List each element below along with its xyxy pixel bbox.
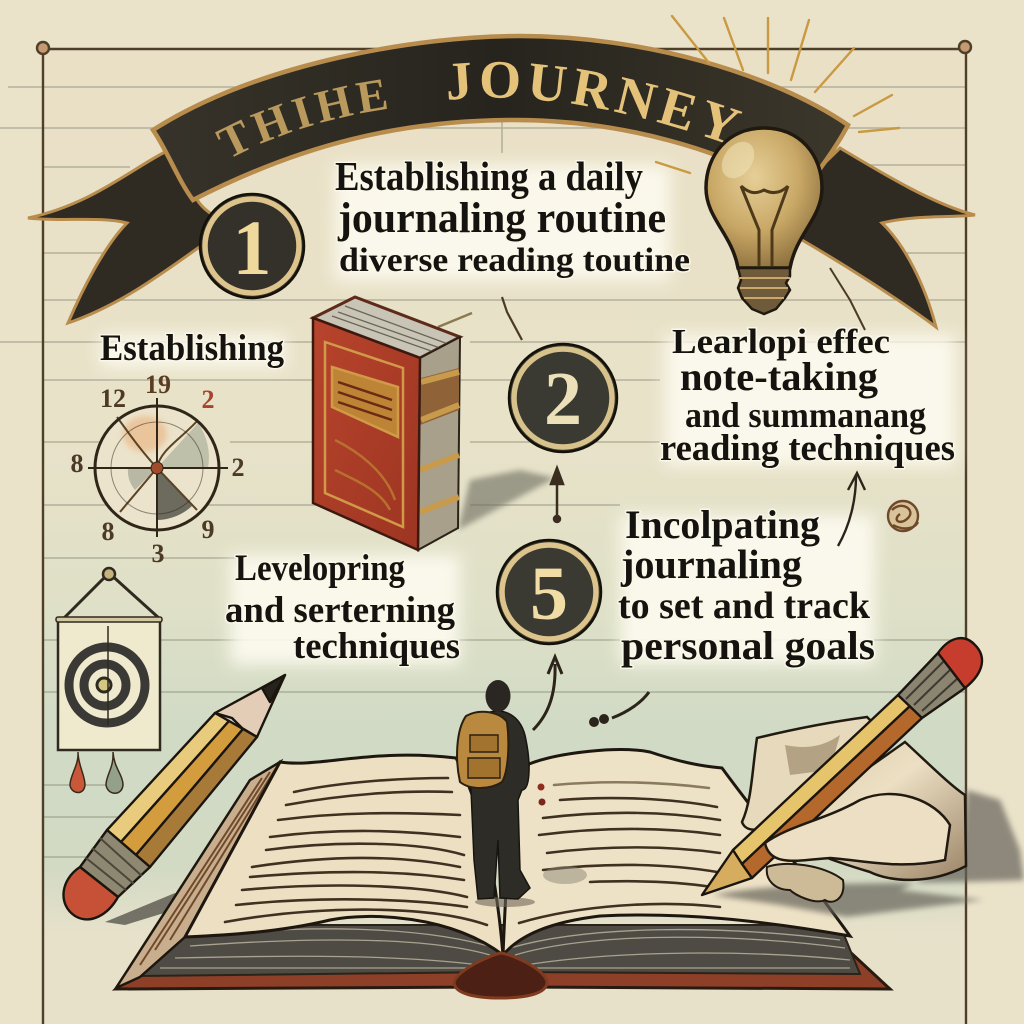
hand shadow: [713, 790, 1024, 917]
target rings: [69, 626, 145, 725]
step 1 text: diverse reading toutine: [339, 242, 690, 279]
step 1 text: Establishing a daily: [335, 153, 643, 199]
left pencil shadow: [105, 893, 190, 925]
banner title: THIHE: THIHE: [215, 79, 387, 157]
clock dial: 8: [102, 517, 114, 546]
title banner: [28, 34, 976, 331]
arrow: to techniques: [838, 473, 865, 546]
clock dial: 8: [70, 449, 84, 478]
banner title: JOURNEY: JOURNEY: [448, 62, 742, 142]
step 5 text: Incolpating: [625, 502, 820, 547]
arrow: between steps: [551, 468, 563, 522]
book shadow: [458, 470, 555, 530]
step 5 text: personal goals: [621, 623, 875, 668]
step 3 text: Learlopi effec: [672, 322, 890, 361]
back of hand: [780, 742, 966, 880]
step 1 text: [335, 153, 690, 279]
red book: [313, 297, 555, 550]
clock dial: 19: [145, 370, 171, 399]
figure body: [460, 711, 530, 899]
arrows: path to figure: [533, 657, 649, 730]
cover: [116, 938, 890, 989]
book cover: [313, 318, 420, 550]
step 5 text: [618, 502, 875, 668]
clock dial: 2: [202, 385, 214, 414]
book clasp: [454, 953, 547, 998]
left page: [185, 755, 503, 955]
figure shadow: [475, 897, 535, 907]
step 2 badge: 2: [544, 357, 582, 441]
clock dial: [70, 370, 244, 568]
clock dial: 9: [202, 515, 214, 544]
step 3 text: note-taking: [680, 354, 878, 399]
hand holding pencil: [742, 717, 966, 880]
left step text: [225, 548, 460, 667]
step 3 text: reading techniques: [660, 428, 955, 469]
step 5 text: journaling: [620, 541, 802, 587]
curled fingers: [767, 864, 843, 902]
backpack: [457, 712, 508, 788]
banner main arc: [153, 36, 848, 200]
right page writing: [519, 782, 720, 923]
step 3 text: and summanang: [685, 395, 926, 435]
clock dial: 3: [152, 539, 164, 568]
fingers behind pencil: [742, 717, 872, 830]
step 2 badge: [509, 344, 617, 452]
page stack: [140, 925, 860, 976]
thumb over pencil: [765, 794, 950, 864]
left step text: techniques: [293, 626, 460, 667]
step 1 badge: [200, 194, 304, 298]
bulb rays: [656, 16, 899, 173]
right pencil: [702, 638, 982, 895]
book pages top: [313, 297, 460, 358]
ink knot doodle: [888, 501, 918, 531]
step 1 text: journaling routine: [337, 195, 666, 242]
book ornament: [325, 342, 403, 527]
clock dial: 12: [100, 384, 126, 413]
left board: [116, 762, 280, 988]
target banner: [56, 568, 162, 793]
step 5 text: to set and track: [618, 585, 871, 627]
step 3 text: [660, 322, 955, 469]
banner tail right: [775, 148, 975, 327]
arrow: right scribble: [830, 268, 865, 330]
label: establishing: Establishing: [100, 328, 284, 369]
book spine: [418, 337, 460, 550]
left step text: Levelopring: [235, 548, 405, 589]
banner tail left: [28, 152, 240, 323]
left pencil: [64, 675, 285, 919]
left page writing: [225, 778, 487, 925]
figure head: [486, 680, 510, 712]
open book: [116, 750, 890, 998]
target tassels: [70, 752, 85, 793]
left step text: and serterning: [225, 590, 455, 631]
arrow: upper middle: [502, 297, 522, 340]
light bulb icon: [656, 16, 899, 314]
light halos behind text: [100, 165, 955, 665]
clock dial: 2: [232, 453, 244, 482]
figure with backpack: [457, 680, 535, 907]
step 1 badge: 1: [232, 204, 272, 291]
step 5 badge: 5: [530, 552, 568, 636]
right page: [503, 750, 850, 955]
step 5 badge: [497, 540, 601, 644]
